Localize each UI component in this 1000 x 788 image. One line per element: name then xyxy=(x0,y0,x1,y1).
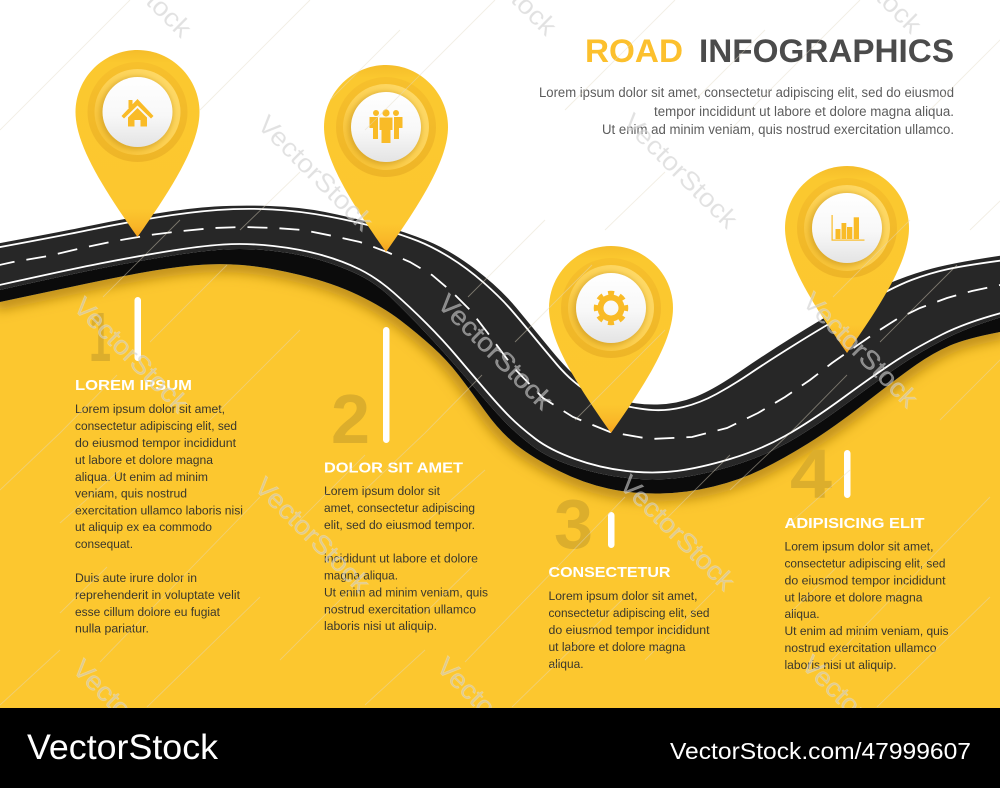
marker bar 3 xyxy=(608,512,614,548)
text block 4: Ut enim ad minim veniam, quis xyxy=(784,624,948,638)
winding road xyxy=(0,206,1000,494)
heading 3: CONSECTETUR xyxy=(548,564,671,581)
yellow ground panel xyxy=(0,264,1000,710)
icon: people xyxy=(370,109,402,143)
footer bar xyxy=(0,708,1000,788)
title: ROAD xyxy=(585,33,683,69)
text block 2: Lorem ipsum dolor sit xyxy=(324,484,441,498)
text block 3 xyxy=(548,589,710,671)
map pin 3: settings xyxy=(549,246,673,433)
text block 1: Lorem ipsum dolor sit amet, xyxy=(75,402,225,416)
text: VectorStock xyxy=(249,471,377,599)
text block 2: incididunt ut labore et dolore xyxy=(324,552,478,566)
panel: step 4 xyxy=(784,435,948,672)
panel: step 2 xyxy=(324,327,488,633)
heading 1: LOREM IPSUM xyxy=(75,377,192,394)
text: VectorStock xyxy=(617,107,745,235)
number 3: 3 xyxy=(554,485,593,563)
heading 4: ADIPISICING ELIT xyxy=(784,515,924,532)
text block 2: laboris nisi ut aliquip. xyxy=(324,619,437,633)
text: VectorStock xyxy=(614,469,742,597)
text block 1: esse cillum dolore eu fugiat xyxy=(75,605,221,619)
text block 3: do eiusmod tempor incididunt xyxy=(548,623,710,637)
text: VectorStock xyxy=(252,109,380,237)
text block 1: exercitation ullamco laboris nisi xyxy=(75,504,243,518)
road underside xyxy=(0,249,1000,494)
text: VectorStock xyxy=(432,288,560,416)
text block 3: ut labore et dolore magna xyxy=(548,640,686,654)
map pin 2: team xyxy=(324,65,448,252)
text block 1: consectetur adipiscing elit, sed xyxy=(75,419,237,433)
panel: step 3 xyxy=(548,485,710,671)
number 2: 2 xyxy=(331,380,370,458)
text: VectorStock xyxy=(68,291,196,419)
text block 1: consequat. xyxy=(75,537,133,551)
number 1: 1 xyxy=(89,298,111,376)
intro text block: Lorem ipsum dolor sit amet, consectetur adipiscing elit, sed do eiusmod xyxy=(539,85,954,100)
marker bar 2 xyxy=(383,327,390,443)
text block 1: nulla pariatur. xyxy=(75,622,149,636)
marker bar 1 xyxy=(134,297,141,361)
map pin 4: chart xyxy=(785,166,909,353)
number 4: 4 xyxy=(790,435,832,513)
text block 1 xyxy=(75,402,243,636)
text block 4: aliqua. xyxy=(784,607,820,621)
marker bar 4 xyxy=(844,450,850,498)
map pin 1: home xyxy=(76,50,200,237)
text block 3: consectetur adipiscing elit, sed xyxy=(548,606,710,620)
icon: gear xyxy=(596,293,626,323)
text block 1: ut aliquip ex ea commodo xyxy=(75,520,212,534)
text block 1: aliqua. Ut enim ad minim xyxy=(75,470,208,484)
text block 1: ut labore et dolore magna xyxy=(75,453,213,467)
title: INFOGRAPHICS xyxy=(699,33,954,69)
text block 2: elit, sed do eiusmod tempor. xyxy=(324,518,475,532)
text block 1: reprehenderit in voluptate velit xyxy=(75,588,241,602)
road lower edge line xyxy=(0,244,1000,472)
footer logo text: VectorStock xyxy=(27,728,219,767)
intro text block xyxy=(539,85,954,137)
road centre dashes xyxy=(0,227,1000,439)
text block 4: laboris nisi ut aliquip. xyxy=(784,658,896,672)
text block 2: Ut enim ad minim veniam, quis xyxy=(324,586,488,600)
text block 3: aliqua. xyxy=(548,657,584,671)
road upper edge line xyxy=(0,209,1000,410)
text block 1: Duis aute irure dolor in xyxy=(75,571,197,585)
road asphalt xyxy=(0,206,1000,480)
heading 2: DOLOR SIT AMET xyxy=(324,460,463,476)
text block 4: consectetur adipiscing elit, sed xyxy=(784,556,946,570)
text: VectorStock xyxy=(797,286,925,414)
text block 4: do eiusmod tempor incididunt xyxy=(784,574,946,588)
icon: house xyxy=(122,99,154,126)
intro text block: Ut enim ad minim veniam, quis nostrud exercitation ullamco. xyxy=(602,122,954,137)
text block 1: do eiusmod tempor incididunt xyxy=(75,436,237,450)
footer image id: VectorStock.com/47999607 xyxy=(670,738,971,764)
intro text block: tempor incididunt ut labore et dolore magna aliqua. xyxy=(654,104,954,119)
text: VectorStock xyxy=(796,649,924,777)
text block 2: amet, consectetur adipiscing xyxy=(324,501,475,515)
text block 1: veniam, quis nostrud xyxy=(75,486,187,500)
text block 2 xyxy=(324,484,488,633)
text block 2: nostrud exercitation ullamco xyxy=(324,602,476,616)
text: VectorStock xyxy=(67,653,195,781)
text block 2: magna aliqua. xyxy=(324,568,398,582)
text block 4 xyxy=(784,540,948,672)
text block 3: Lorem ipsum dolor sit amet, xyxy=(548,589,698,603)
text: VectorStock xyxy=(431,651,559,779)
text block 4: Lorem ipsum dolor sit amet, xyxy=(784,540,934,554)
title xyxy=(585,33,954,69)
panel: step 1 xyxy=(75,297,243,636)
icon: bar chart xyxy=(832,215,864,241)
text block 4: nostrud exercitation ullamco xyxy=(784,641,937,655)
text block 4: ut labore et dolore magna xyxy=(784,590,923,604)
